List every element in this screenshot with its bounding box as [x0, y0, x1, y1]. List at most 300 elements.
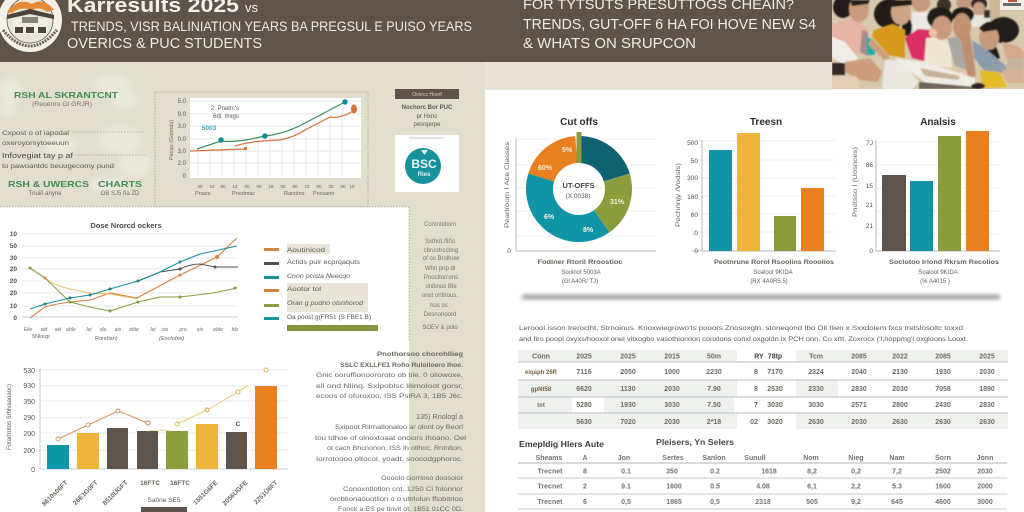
axis labels: 0.0: [178, 137, 187, 143]
panel: course card: Ovorcc Hoorf: [412, 92, 442, 98]
table header: Jonn: [977, 455, 993, 462]
donut percentages: 31%: [610, 199, 625, 206]
y axis labels: 930: [23, 383, 35, 390]
table row 2: 6620: [576, 386, 592, 393]
x axis groups: Ranotns: [284, 191, 305, 197]
legend labels: Actids puir ecprqaquts: [287, 259, 361, 266]
x axis title: Saône SE5: [148, 497, 181, 504]
y axis labels: 200: [23, 448, 35, 455]
x axis labels: 18: [268, 184, 274, 189]
y axis labels: 30: [10, 255, 17, 262]
chart: donut cut offs: 0: [507, 248, 511, 255]
table row 1: 8: [583, 468, 587, 476]
legend swatches: [264, 248, 279, 320]
table row 3: 3030: [664, 402, 680, 409]
axis labels: 9.0: [178, 112, 187, 118]
y axis title: Pechnnjy /Vodsls): [676, 163, 682, 227]
legend: [264, 244, 378, 331]
panel: side note on beige strip: onibnus Ble: [425, 284, 457, 290]
axis labels: 5.0: [178, 99, 187, 105]
table row 3: 505: [806, 499, 818, 506]
y axis labels: 200: [23, 431, 35, 438]
table row 2: [538, 484, 993, 490]
card text: [402, 105, 453, 128]
table header: Sunull: [744, 455, 766, 462]
donut title: Cut offs: [560, 117, 598, 128]
table row 1: [525, 369, 995, 376]
table row 1: 1618: [761, 468, 777, 476]
text block: program notes: Gnic ooruffionoororoto ob tile. 0 oliowoxe,: [316, 372, 463, 379]
table row 2: 1600: [666, 484, 682, 490]
rotated x labels: 2056ÙGFE: [220, 478, 250, 507]
table header: Sorn: [935, 455, 951, 462]
table row 2: [531, 386, 995, 393]
donut y labels: Pearlroom I Ace Classes: [504, 141, 511, 228]
table row 1: Trecnet: [538, 468, 563, 476]
table row 3: 0,5: [710, 499, 720, 506]
y axis labels: 0: [31, 467, 35, 474]
y ticks: 15: [866, 183, 873, 190]
panel: side note on beige strip: Contnitdiom: [424, 222, 456, 228]
bars: [47, 386, 277, 469]
table header: 2015: [664, 354, 680, 360]
panel: side note on beige strip: SOEV & polo: [422, 325, 458, 331]
x axis labels: pro: [178, 327, 187, 333]
x axis labels: 08: [256, 184, 262, 189]
student 3 magenta top: [905, 7, 953, 68]
x axis labels: eble: [213, 327, 223, 333]
table row 1: 8: [754, 369, 758, 376]
caption: [714, 260, 835, 285]
card text: pesrqerpe: [413, 122, 441, 128]
table row 3: 2830: [979, 402, 995, 409]
icon: BSC badge: [405, 148, 441, 184]
text block: program notes: ecoos of oforoxoo, ISS PslRA 3, 1B5 J6c.: [316, 393, 463, 400]
table row 2: 2030: [892, 386, 908, 393]
y ticks: 7J: [866, 140, 873, 147]
axis labels: 0: [183, 174, 187, 180]
card box: [395, 135, 459, 192]
markers: [44, 260, 216, 306]
heading: lower table center: Pleisers, Yn Selers: [656, 438, 735, 447]
chart title: Analsis: [920, 117, 956, 128]
table row 1: 2324: [808, 369, 824, 376]
table header: 50m: [707, 354, 721, 360]
table row 3: 7.50: [707, 402, 721, 409]
table header: 2025: [620, 354, 636, 360]
x axis groups: Ronrtlan): [95, 336, 118, 342]
y ticks: 60: [691, 212, 698, 219]
panel: side note on beige strip: Sxthot./fiño: [425, 239, 456, 245]
annotation: 6dl. mxgs: [213, 114, 239, 120]
y ticks: 300: [687, 175, 698, 182]
x axis labels: 20: [328, 184, 334, 189]
x axis groups: Pnodmac: [232, 191, 255, 197]
table row 3: 4600: [935, 499, 951, 506]
student 1 pink kurta: [832, 0, 875, 56]
text block 4: to pawoantdc beuugecomy pund: [2, 163, 114, 170]
annotation: 2: Pnatrc's: [211, 106, 239, 112]
y axis labels: 20: [10, 266, 17, 273]
table row 1: 1000: [664, 369, 680, 376]
chart title: Treesn: [750, 117, 782, 128]
x axis labels: hlo: [232, 327, 239, 333]
donut percentages: 60%: [538, 165, 553, 172]
y axis labels: 0: [13, 315, 17, 322]
x axis labels: 40: [197, 184, 203, 189]
x axis labels: eble: [129, 327, 139, 333]
y ticks: 500: [687, 140, 698, 147]
bar annotation: C: [236, 421, 241, 428]
y axis labels: [10, 231, 17, 322]
axis labels: [178, 99, 187, 180]
x axis labels: 60: [220, 184, 226, 189]
student 5 blue top: [972, 17, 1024, 73]
table header: Nam: [889, 455, 905, 462]
donut percentages: 5%: [562, 147, 573, 154]
table row 4: 2630: [935, 419, 951, 426]
table row 2: 2330: [808, 386, 824, 393]
table row 4: 2030: [851, 419, 867, 426]
series: teal: [30, 246, 237, 309]
caption: Peotnrune Rorol Rsoolins Rooolios: [714, 260, 835, 266]
y ticks: 0: [694, 248, 698, 255]
table row 3: Trecnet: [538, 499, 563, 506]
series: yellow: [30, 268, 138, 299]
text block: program notes: Pnothorsoo chorohllieg: [377, 351, 463, 358]
series: green: [197, 102, 345, 149]
donut percentages: 8%: [583, 227, 594, 234]
y axis labels: 530: [23, 368, 35, 375]
table row 2: 5.3: [892, 484, 902, 490]
table row 2: gpNt58: [531, 387, 552, 393]
x axis labels: 00: [280, 184, 286, 189]
table row 1: 1930: [935, 369, 951, 376]
table row 1: 0.2: [710, 468, 720, 476]
table row 4: 3020: [767, 419, 783, 426]
caption: Soaloot 9KIDA: [753, 270, 793, 276]
table header: Sanlon: [702, 455, 726, 462]
text block: program notes: Sxipoot Rilrnatlonaloo ar olont oy Beorl: [335, 424, 463, 431]
panel: course card: [395, 89, 459, 192]
table row 3: 2800: [892, 402, 908, 409]
rotated x labels: [41, 478, 279, 508]
text block: program notes: 135) Rnologl a: [416, 414, 463, 421]
table row 1: eiqaph 26R: [525, 370, 558, 376]
table row 1: 2030: [979, 369, 995, 376]
sleeve, hand and papers: [832, 37, 1024, 89]
legend labels: [287, 247, 371, 321]
text block 3: Infovegiat tay p af: [2, 153, 73, 160]
table row 2: 7058: [935, 386, 951, 393]
rotated x labels: 1551G6FE: [192, 479, 220, 507]
table row 2: 0.5: [710, 484, 720, 490]
x axis labels: Eile: [24, 327, 32, 333]
table row 3: 2318: [755, 499, 771, 506]
green heading 3: CHARTS: [98, 179, 142, 189]
table header: A: [582, 455, 588, 462]
table row 1: 2040: [851, 369, 867, 376]
x axis groups: Pnaxs: [195, 191, 211, 197]
axis labels: 3.0: [178, 149, 187, 155]
bars: [882, 131, 989, 251]
x axis labels: 00: [244, 184, 250, 189]
card text: pr Hxnc: [417, 114, 437, 120]
series: dark: [138, 264, 238, 281]
donut caption: Fodiner Rtoril Rroostioc: [538, 260, 623, 266]
series: orange: [190, 110, 355, 151]
table row 3: [538, 499, 993, 506]
table header: 78tp: [768, 354, 782, 360]
photo corner label: [1000, 0, 1024, 10]
text block: program notes: [315, 351, 466, 512]
rotated x labels: 16FTC: [140, 480, 160, 487]
table row 2: 4.08: [756, 484, 770, 490]
table row 1: 7,2: [892, 468, 902, 476]
table row 2: 1890: [979, 386, 995, 393]
table row 3: 2571: [851, 402, 867, 409]
x axis labels: 12: [232, 184, 238, 189]
table row 3: 6: [583, 499, 587, 506]
table row 1: 2230: [706, 369, 722, 376]
text block 1: Cxpost o of iapodal: [2, 130, 70, 137]
photo: students looking at papers: [832, 0, 1024, 89]
table row 3: tot: [537, 403, 545, 409]
x axis labels: 10: [349, 184, 355, 189]
table row 3: 645: [891, 499, 903, 506]
markers: [218, 99, 348, 143]
table row 1: 2502: [935, 468, 951, 476]
table row 2: 6,1: [807, 484, 817, 490]
panel: side note on beige strip: of os Brolhow: [423, 256, 460, 262]
x axis labels: ais: [197, 327, 204, 333]
chart: treesn bar chart: [676, 117, 836, 285]
caption: Soclotoo Irlond Rkrsm Recolios: [889, 260, 1000, 266]
chart title: Dose Nrorcd ockers: [90, 221, 162, 230]
panel: side note on beige strip: Desnonoord: [424, 312, 456, 318]
green heading 2: RSH & UWERCS: [8, 179, 89, 189]
table header: Sertes: [662, 455, 684, 462]
text block: program notes: Oooolo ciorrloso doosoior: [381, 475, 463, 482]
legend labels: Aootor tol: [287, 286, 322, 293]
table row 3: [537, 402, 995, 409]
donut percentages: [538, 147, 625, 234]
table header: 2025: [576, 354, 592, 360]
chart: upper trend line chart: [155, 92, 368, 207]
caption 2: OB SJ5 ña ZD: [101, 191, 140, 197]
y ticks: 21: [866, 223, 873, 230]
subtitle line 2: OVERICS & PUC STUDENTS: [67, 35, 262, 52]
title suffix: vs: [245, 0, 258, 15]
table row 3: 2430: [935, 402, 951, 409]
x axis labels: 00: [316, 184, 322, 189]
legend labels: Oran g pudno olsnhorod: [287, 300, 363, 307]
table header: 2025: [979, 354, 995, 360]
x axis labels: [197, 184, 355, 189]
y axis labels: 10: [10, 303, 17, 310]
x axis labels: lei: [86, 327, 92, 333]
panel: side note on beige strip: Pnoctlon'ons: [424, 275, 458, 281]
y axis labels: 20: [10, 290, 17, 297]
table row 2: 2: [583, 484, 587, 490]
table header: Jon: [618, 455, 630, 462]
table header: Nieg: [848, 455, 864, 462]
text block: table intro: [519, 325, 968, 343]
legend labels: Aoutinicod: [287, 247, 325, 254]
table row 4: [576, 419, 995, 426]
table header: Nom: [803, 455, 819, 462]
teal tag: 5003: [202, 125, 217, 132]
caption: (% A4015 ): [920, 279, 950, 285]
table row 3: 1865: [666, 499, 682, 506]
table row 2: 2,2: [851, 484, 861, 490]
x axis groups: Pnxsann: [313, 191, 334, 197]
table shading: [518, 350, 1008, 429]
table row 1: 350: [666, 468, 678, 476]
table row 2: 2830: [851, 386, 867, 393]
table row 1: 8,2: [807, 468, 817, 476]
dark footer tab: [141, 507, 187, 512]
chart: multi-line chart: [10, 221, 239, 342]
panel: side note on beige strip: hos os: [430, 303, 448, 309]
text block: program notes: tou tdhoe of olnoxtoaat onciors Ihoano. Oel: [315, 435, 466, 442]
table row 1: 7116: [576, 369, 592, 376]
table row 3: 3000: [977, 499, 993, 506]
table header: 2085: [935, 354, 951, 360]
annotation: [211, 106, 239, 120]
x axis labels: eble: [66, 327, 76, 333]
table row 4: 2630: [979, 419, 995, 426]
x axis labels: ois: [162, 327, 169, 333]
table row 4: 02: [750, 419, 758, 426]
x axis labels: aki: [55, 327, 62, 333]
text block: table intro: Leroool isson Ireroclht, Strnoinus. Knoxwiegrowo'ts pooors Znosoxgln. stoneqond Ibo Oll Ilien x Sxxdolem fxcs tretslosoltc toxxd: [519, 325, 964, 332]
text block: program notes: ell ond Nlinq. Sxlpoblsc lilimoloot gorsr,: [316, 383, 463, 390]
heading: green: RSH AL SKRANTCNT: [14, 90, 119, 100]
y axis labels: 290: [23, 415, 35, 422]
table header: Tcm: [809, 354, 823, 360]
bars: [709, 133, 824, 251]
text block: table intro: and firo poopl oxyxs/hooxol onel vitxogbo vasothiorxlon conxlons conxl oxgoldn ix PCH onn. Co xrtt. Zoxrocx ('l,hoppmg'l oxgloons Looxt.: [519, 336, 968, 343]
caption: (RX 4A0R5.5): [750, 279, 788, 285]
axis labels: 3.0: [178, 124, 187, 130]
donut center label: UT-OFFS: [562, 181, 595, 190]
background students: [905, 0, 1000, 32]
donut caption: Soolnot 5003A: [561, 270, 601, 276]
table row 2: 7.90: [707, 386, 721, 393]
table header: Conn: [532, 354, 550, 360]
x axis labels: ole: [100, 327, 107, 333]
table row 3: 0,5: [621, 499, 631, 506]
table row 2: 2530: [767, 386, 783, 393]
y axis labels: 20: [10, 278, 17, 285]
table: results bottom: [518, 455, 1007, 509]
y ticks: 21: [866, 202, 873, 209]
icon: BSC badge: BSC: [411, 157, 437, 171]
table row 1: 0.1: [621, 468, 631, 476]
table row 1: 2050: [620, 369, 636, 376]
rotated x labels: 8610s06FT: [41, 479, 69, 508]
donut percentages: 6%: [544, 214, 555, 221]
right heading line 2: TRENDS, GUT-OFF 6 HA FOI HOVE NEW S4: [523, 17, 816, 33]
y ticks: [866, 140, 873, 255]
line markers: [56, 368, 268, 441]
table: results top: [518, 350, 1008, 429]
donut caption: (Gl A40R/ TJ): [562, 279, 598, 285]
text block: program notes: Iorrotoooo oltocol, yoadt. soocodgphoroc.: [316, 456, 463, 463]
table row 1: 7170: [767, 369, 783, 376]
x axis labels: 60: [292, 184, 298, 189]
x axis groups: [32, 334, 184, 342]
y axis labels: [23, 368, 35, 474]
legend labels: Cnon pcista Neecqo: [287, 273, 350, 280]
right heading line 3: & WHATS ON SRUPCON: [523, 36, 696, 52]
heading: lower table left: Emepldig Hlers Aute: [519, 440, 605, 449]
subtitle line 1: TRENDS, VISR BALINIATION YEARS BA PREGSUL E PUISO YEARS: [71, 19, 472, 34]
text block: program notes: ot cach Bhcnonon, ISS Ih ollhoc, Rntnlton,: [327, 445, 463, 452]
panel: side note on beige strip: Whn pnp dl: [425, 266, 455, 272]
chart: donut cut offs: [504, 117, 656, 285]
y axis title: Pndtsso I (Uosnces): [853, 147, 859, 217]
header band: [0, 0, 832, 62]
panel: side note on beige strip: cbrootrccbng: [424, 248, 458, 254]
table header: 2022: [892, 354, 908, 360]
donut segments: [526, 132, 632, 242]
table row 1: [538, 468, 993, 476]
axis labels: 2.0: [178, 161, 187, 167]
text block: program notes: SSLC EXLLFE1 Rofio Ruloiloero Ihoe.: [340, 362, 463, 369]
table row 2: 1130: [620, 386, 636, 393]
card text: Nochorc Bor PUC: [402, 105, 453, 111]
x axis labels: ais: [115, 327, 122, 333]
table header: [536, 455, 993, 462]
table row 2: 1600: [935, 484, 951, 490]
donut caption: [538, 260, 623, 285]
y axis title: Pacqu (Goonds): [169, 120, 175, 160]
y axis labels: 10: [10, 231, 17, 238]
chart: bar and line chart: [7, 368, 288, 512]
table row 3: 9,2: [851, 499, 861, 506]
y ticks: 160: [687, 194, 698, 201]
caption: [889, 260, 1000, 285]
table row 2: 8: [754, 386, 758, 393]
y axis labels: 50: [10, 243, 17, 250]
legend labels: Oa poost g(FR51 (S FBE1 B): [287, 314, 371, 321]
table row 2: 9.1: [621, 484, 631, 490]
caption: Soaloot 9KIDA: [918, 270, 958, 276]
table row 1: 0,2: [851, 468, 861, 476]
section shadow divider: [522, 295, 1000, 299]
x axis labels: lei: [150, 327, 156, 333]
student 2 yellow sari: [868, 0, 912, 60]
table row 2: 2000: [977, 484, 993, 490]
x axis labels: 18: [209, 184, 215, 189]
table row 4: 2030: [664, 419, 680, 426]
panel: side note on beige strip: [422, 222, 460, 331]
text block 2: oxeroyorsytoeeuun: [2, 140, 69, 147]
rotated x labels: 26E1G0FT: [72, 479, 99, 507]
table row 4: 7020: [620, 419, 636, 426]
table row 3: 1930: [620, 402, 636, 409]
table header: Sheams: [536, 455, 563, 462]
x axis groups: [195, 191, 334, 197]
text block: program notes: orcbtionaóuotlion o o ultrlolun ffiobitrloo: [330, 496, 464, 503]
y axis labels: 350: [23, 399, 35, 406]
panel: white right background: [485, 90, 1024, 512]
table row 1: 2130: [892, 369, 908, 376]
table row 4: 2630: [892, 419, 908, 426]
chart: analysis bar chart: [853, 117, 1000, 285]
